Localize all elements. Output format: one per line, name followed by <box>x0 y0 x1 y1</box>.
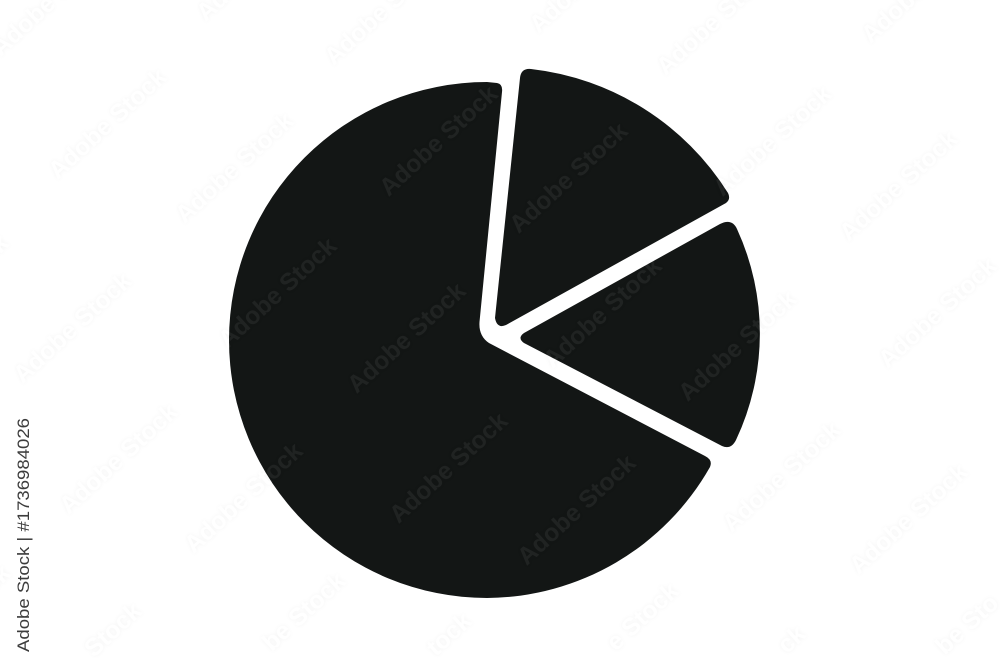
Adobe Stock watermark pattern: Adobe Stock <box>54 398 183 520</box>
Adobe Stock watermark pattern: Adobe Stock <box>342 277 471 399</box>
Adobe Stock watermark pattern: Adobe Stock <box>708 80 837 202</box>
Adobe Stock watermark pattern: tock <box>422 607 477 661</box>
lower right pie slice <box>520 222 760 447</box>
Adobe Stock watermark pattern: Adobe Stock <box>374 80 503 202</box>
Adobe Stock watermark pattern: Adobe Stock <box>170 107 299 229</box>
Adobe Stock watermark pattern: be Stock <box>258 567 351 656</box>
pie chart icon <box>229 69 760 598</box>
Adobe Stock watermark pattern: Adobe Stock <box>384 407 513 529</box>
Adobe Stock watermark pattern: Stock <box>80 597 147 662</box>
large pie slice <box>229 82 711 598</box>
upper right pie slice <box>495 69 729 326</box>
Adobe Stock watermark pattern: Adobe Stock <box>8 267 137 389</box>
Adobe Stock watermark pattern: Adobe Stock <box>43 63 172 185</box>
Adobe Stock watermark pattern: Adobe Stock <box>213 232 342 354</box>
Adobe Stock watermark pattern: Adobe Stock <box>504 117 633 239</box>
Adobe Stock watermark pattern: Adobe Stock <box>512 449 641 571</box>
vertical stock ID credit: Adobe Stock | #1736984026 <box>14 418 33 652</box>
Adobe Stock watermark pattern: Adobe Stock <box>538 252 667 374</box>
Adobe Stock watermark pattern: Adobe Stock <box>179 437 308 559</box>
Adobe Stock watermark pattern: Adobe Stock <box>844 458 973 580</box>
Adobe Stock watermark pattern: ck <box>773 620 811 659</box>
Adobe Stock watermark pattern: Adobe Stock <box>873 252 1000 374</box>
Adobe Stock watermark pattern: e Stock <box>602 577 684 656</box>
Adobe Stock watermark pattern: Adobe Stock <box>717 416 846 538</box>
Adobe Stock watermark pattern: Adobe Stock <box>673 285 802 407</box>
Adobe Stock watermark pattern: Adobe Stock <box>834 125 963 247</box>
